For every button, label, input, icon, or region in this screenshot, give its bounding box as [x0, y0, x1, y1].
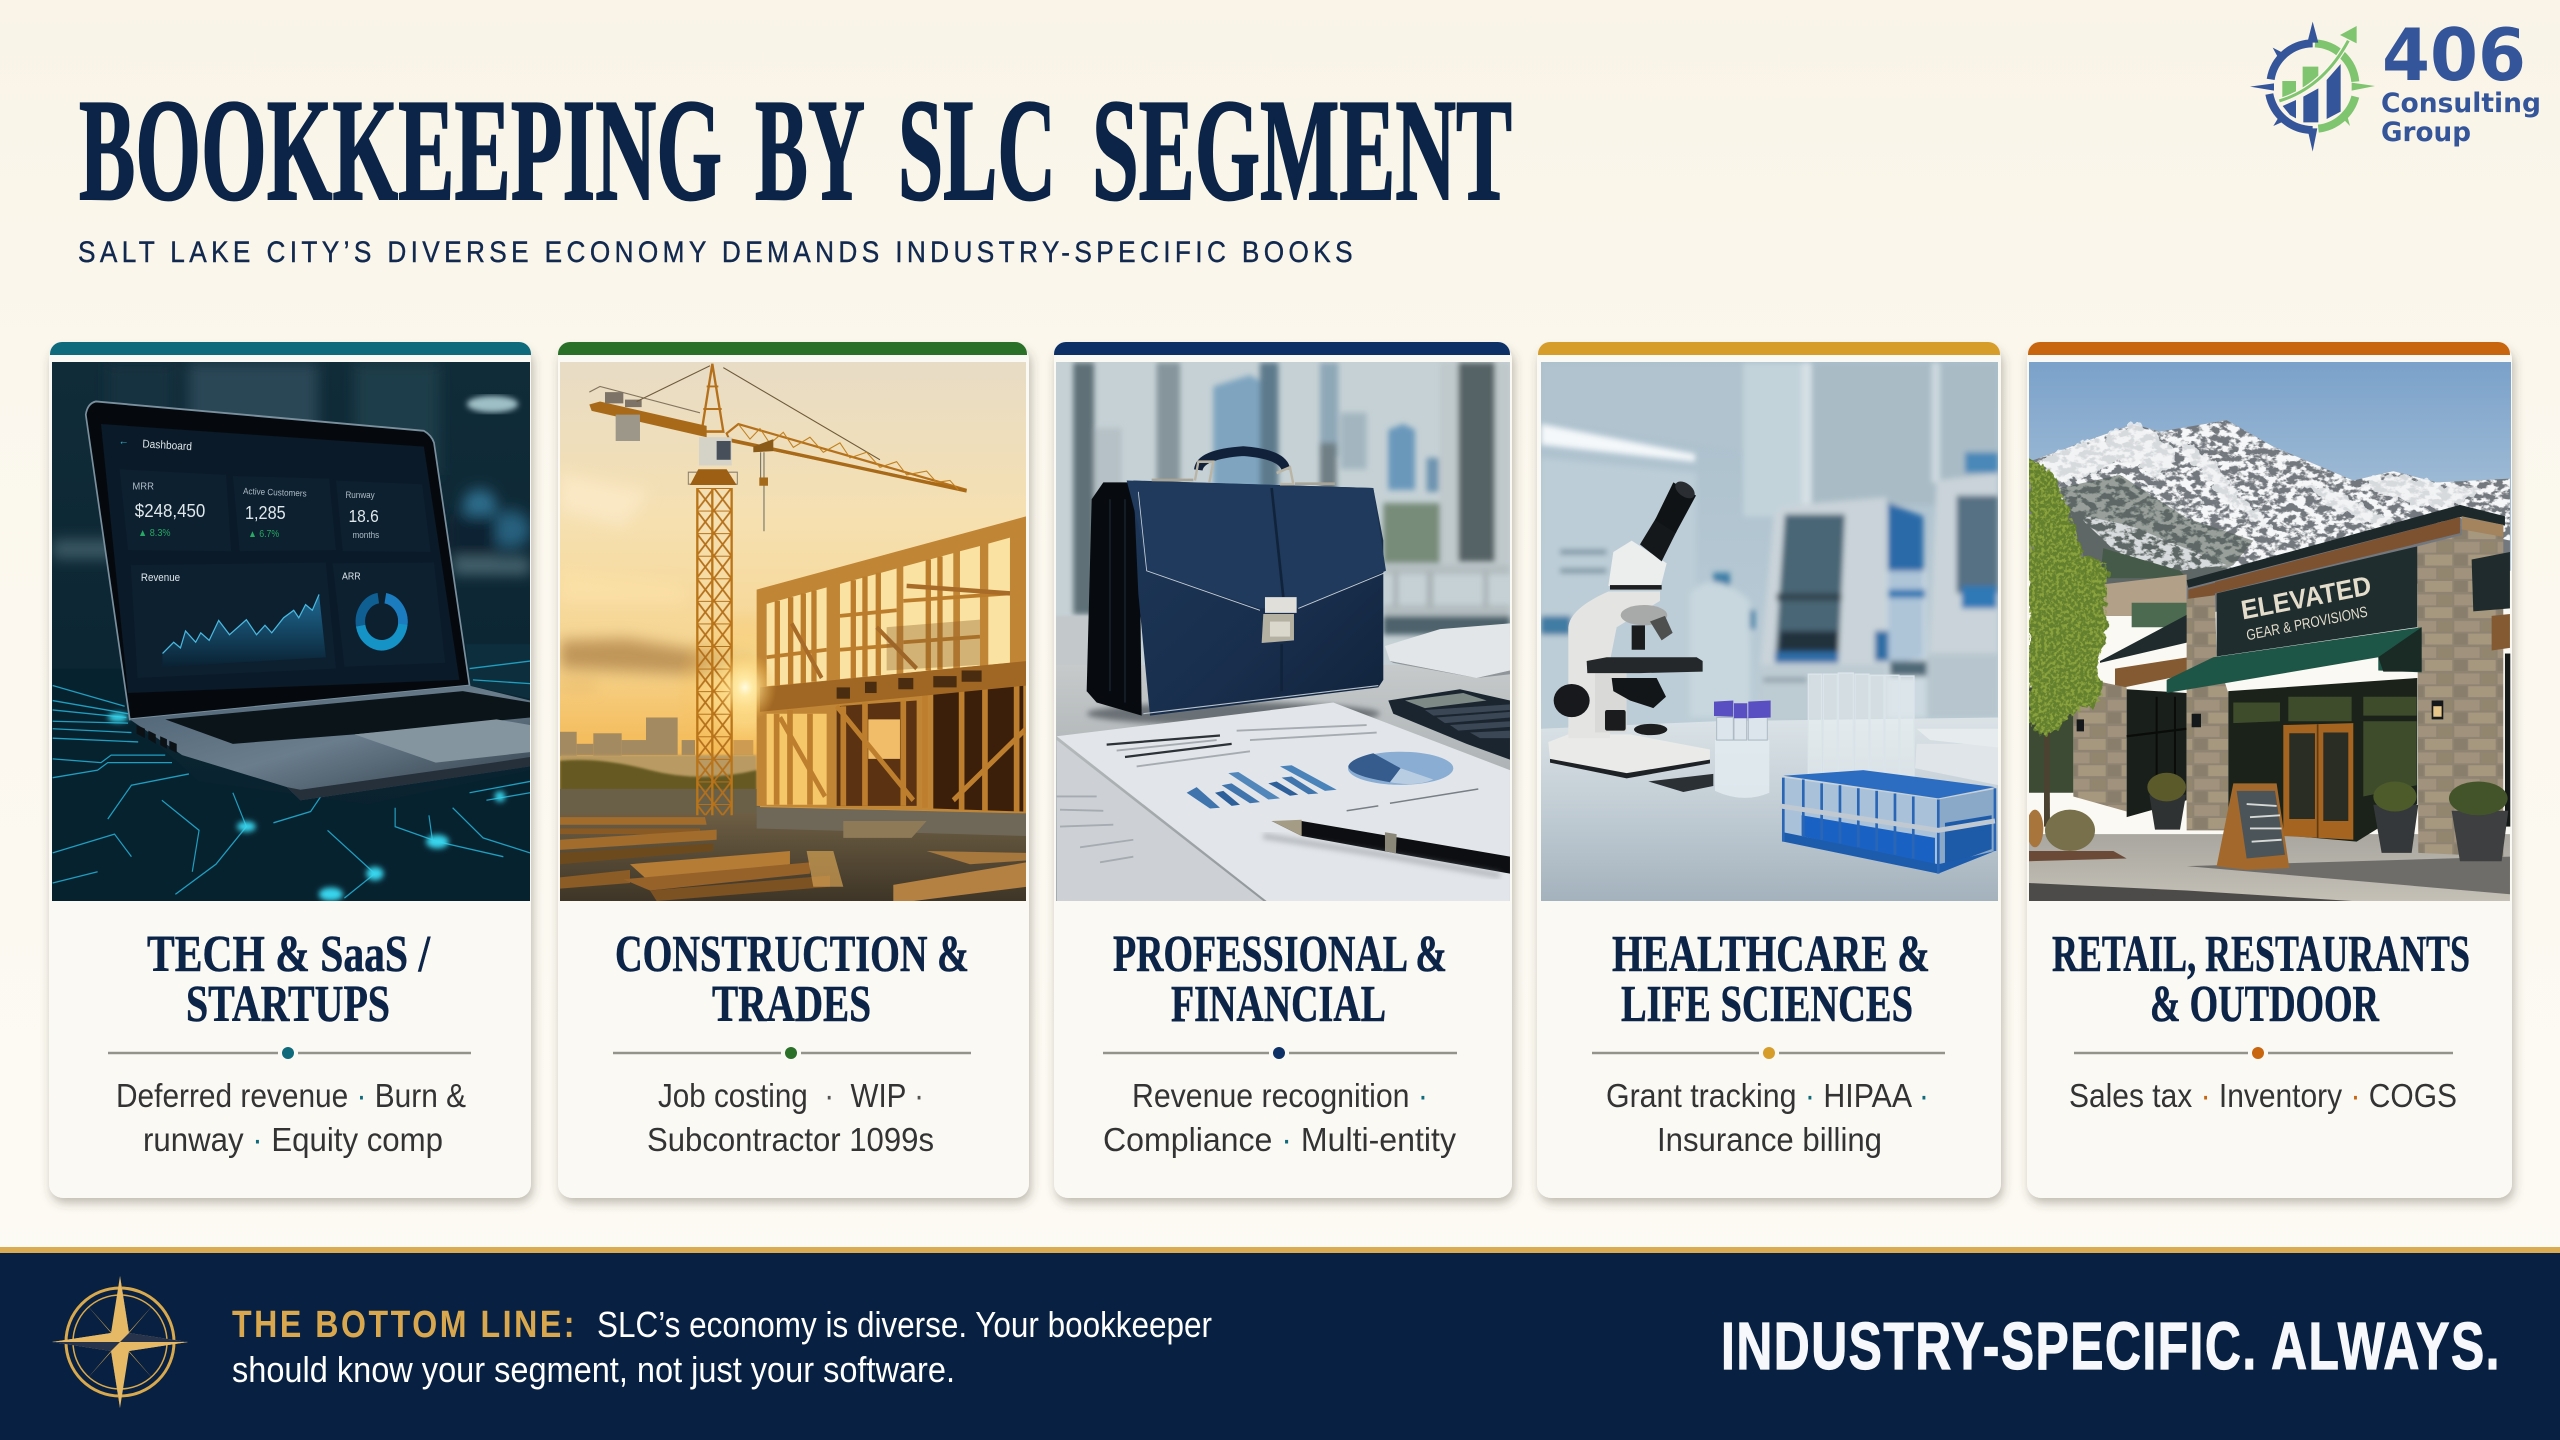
ground	[2029, 834, 2510, 901]
photo: laptop dashboard: Active Customers	[243, 486, 307, 499]
photo: laptop dashboard: months	[353, 530, 379, 540]
photo: lab microscope and test tubes	[1537, 360, 2003, 901]
blue rack	[1780, 770, 1995, 874]
bottom banner	[0, 1247, 2560, 1440]
briefcase	[1087, 451, 1386, 716]
card body text	[1606, 1077, 1929, 1158]
card body text: Subcontractor 1099s	[647, 1121, 934, 1158]
card heading: PROFESSIONAL &	[1113, 926, 1447, 983]
timber frame	[757, 516, 1027, 838]
logo wordmark: 406	[2382, 13, 2526, 97]
gold rule	[0, 1247, 2560, 1254]
card heading: & OUTDOOR	[2150, 976, 2380, 1033]
card heading	[615, 926, 969, 1033]
bottom line text: should know your segment, not just your software.	[232, 1349, 955, 1390]
divider with dot	[1592, 1047, 1945, 1059]
photo: laptop dashboard: ARR	[342, 571, 361, 582]
card body text: Compliance · Multi-entity	[1103, 1121, 1456, 1158]
photo: crane and timber frame at sunset	[557, 360, 1030, 906]
accent bar	[1538, 342, 2000, 355]
title: SEGMENT	[1092, 69, 1512, 231]
awning	[2167, 627, 2422, 693]
navy band	[0, 1253, 2560, 1440]
title: SLC	[898, 69, 1056, 231]
photo: laptop dashboard: $248,450	[135, 500, 205, 521]
card background	[1054, 345, 1512, 1198]
calculator	[1388, 689, 1510, 760]
panel: Construction & Trades	[557, 342, 1030, 1198]
glass vials	[1714, 701, 1771, 798]
card body text: Sales tax · Inventory · COGS	[2069, 1077, 2457, 1114]
logo wordmark: Group	[2381, 117, 2471, 148]
photo: laptop dashboard: Revenue	[141, 573, 180, 584]
planters	[2147, 773, 2508, 861]
photo: laptop dashboard: 18.6	[348, 507, 379, 526]
test tubes	[1808, 673, 1914, 783]
storefront sign text: GEAR & PROVISIONS	[2245, 604, 2369, 645]
card background	[558, 345, 1029, 1198]
divider with dot	[108, 1047, 471, 1059]
sun glare	[716, 658, 774, 717]
panel: Tech & SaaS	[49, 342, 534, 1198]
divider with dot	[2074, 1047, 2453, 1059]
main building	[2187, 505, 2505, 588]
logo: 406 Consulting Group	[2250, 13, 2541, 152]
card body text: Deferred revenue · Burn &	[116, 1077, 466, 1114]
crane	[589, 364, 967, 815]
storefront sign text: ELEVATED	[2239, 571, 2373, 626]
card background	[49, 345, 531, 1198]
tree	[2027, 460, 2107, 851]
title: BY	[755, 69, 865, 231]
card heading	[1113, 926, 1447, 1033]
bottom line text: SLC’s economy is diverse. Your bookkeeper	[597, 1304, 1212, 1345]
card body text: runway · Equity comp	[143, 1121, 443, 1158]
icon: gold compass rose	[52, 1276, 188, 1408]
photo: laptop dashboard: Dashboard	[142, 438, 192, 453]
panel: Healthcare & Life Sciences	[1537, 342, 2003, 1198]
photo: laptop dashboard: Runway	[345, 489, 375, 500]
card background	[1537, 345, 2001, 1198]
card body text: Job costing · WIP ·	[658, 1077, 924, 1114]
icon: compass with rising bars	[2250, 22, 2375, 152]
title: BOOKKEEPING	[79, 69, 722, 231]
card body text	[647, 1077, 934, 1158]
logo wordmark: Consulting	[2381, 88, 2541, 119]
card background	[2027, 345, 2512, 1198]
photo: briefcase and reports	[1053, 360, 1513, 906]
panel: Retail, Restaurants & Outdoor	[2027, 342, 2513, 1198]
card heading: CONSTRUCTION &	[615, 926, 969, 983]
A-frame chalkboard	[2217, 783, 2289, 870]
accent bar	[2028, 342, 2510, 355]
card heading: STARTUPS	[186, 976, 390, 1033]
photo: laptop dashboard: MRR	[132, 481, 154, 493]
mountains	[2029, 420, 2510, 616]
subtitle: SALT LAKE CITY’S DIVERSE ECONOMY DEMANDS INDUSTRY-SPECIFIC BOOKS	[78, 236, 1357, 269]
accent bar	[558, 342, 1027, 355]
lumber	[560, 817, 1027, 901]
photo: laptop dashboard	[50, 360, 534, 906]
photo: laptop dashboard: ←	[119, 435, 129, 448]
card body text: Insurance billing	[1657, 1121, 1882, 1158]
card body text	[1103, 1077, 1456, 1158]
divider with dot	[613, 1047, 971, 1059]
divider with dot	[1103, 1047, 1457, 1059]
card heading: LIFE SCIENCES	[1621, 976, 1913, 1033]
photo: mountain storefront	[2027, 360, 2513, 901]
panel: Professional & Financial	[1053, 342, 1513, 1198]
microscope	[1548, 478, 1710, 778]
bottom line text: THE BOTTOM LINE:	[232, 1304, 577, 1346]
card heading	[2052, 926, 2470, 1033]
card heading	[147, 926, 430, 1033]
bottom line text	[232, 1304, 1212, 1390]
card heading: HEALTHCARE &	[1612, 926, 1930, 983]
card body text	[116, 1077, 466, 1158]
card heading: TRADES	[712, 976, 871, 1033]
card heading: TECH & SaaS /	[147, 926, 430, 983]
report papers	[1057, 740, 1263, 901]
card heading: FINANCIAL	[1171, 976, 1386, 1033]
accent bar	[50, 342, 531, 355]
accent bar	[1054, 342, 1510, 355]
lamps	[2077, 701, 2443, 731]
pen	[1272, 821, 1510, 874]
storefront sign text	[2241, 577, 2370, 640]
photo: laptop dashboard: 1,285	[245, 502, 286, 523]
photo: laptop dashboard: ▲ 6.7%	[248, 528, 279, 539]
card body text: Revenue recognition ·	[1132, 1077, 1428, 1114]
card heading	[1612, 926, 1930, 1033]
left wing	[2100, 614, 2188, 663]
photo: laptop dashboard: ▲ 8.3%	[138, 527, 171, 539]
card body text: Grant tracking · HIPAA ·	[1606, 1077, 1929, 1114]
logo wordmark	[2381, 13, 2541, 148]
